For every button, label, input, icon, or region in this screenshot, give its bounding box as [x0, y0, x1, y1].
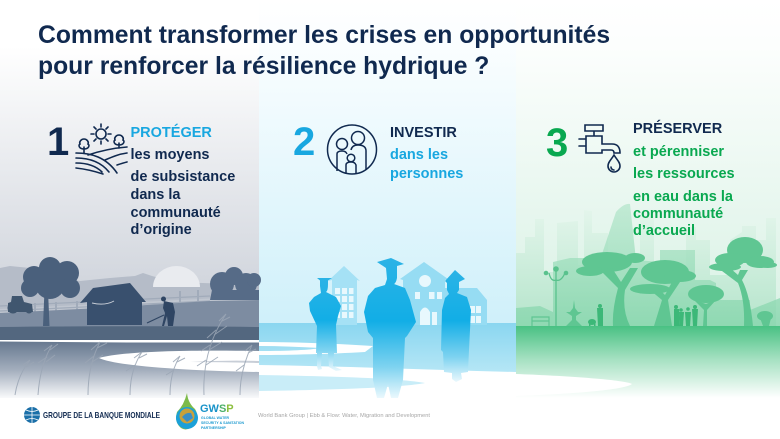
logo: GWSP: GLOBAL WATER [201, 416, 230, 420]
panel: background left [0, 0, 259, 330]
text: section 1: de subsistance [130, 169, 235, 185]
icon: tap and water drop [579, 125, 620, 172]
text: section 2: INVESTIR [390, 125, 457, 141]
text: section 3: et pérenniser [633, 144, 724, 160]
logo: World Bank Group [24, 407, 160, 423]
text: section 2: personnes [390, 166, 463, 182]
footer credit: World Bank Group | Ebb & Flow: Water, Migration and Development [258, 413, 430, 419]
logo: World Bank Group: GROUPE DE LA BANQUE MONDIALE [43, 411, 160, 420]
logo: GWSP: GWSP [200, 403, 234, 415]
text: section 2 [390, 125, 463, 182]
section 2 number: 2 [293, 120, 315, 164]
text: section 1: dans la [130, 187, 181, 203]
logo: GWSP: PARTNERSHIP [201, 426, 226, 430]
panel: background middle [259, 0, 516, 325]
text: section 1 [130, 124, 235, 238]
title: Comment transformer les crises en opportunités [38, 22, 610, 49]
logo: GWSP: SECURITY & SANITATION [201, 421, 244, 425]
text: section 3: PRÉSERVER [633, 120, 723, 137]
panel: background right [516, 0, 780, 330]
text: section 1: les moyens [130, 147, 210, 163]
text: section 2: dans les [390, 147, 448, 163]
illustration: green city park [516, 204, 780, 398]
title [38, 22, 610, 80]
text: section 1: d’origine [130, 222, 192, 238]
text: section 3: les ressources [633, 166, 735, 182]
text: section 3: communauté [633, 206, 723, 222]
icon: fields, sun and trees [76, 124, 127, 174]
text: section 3: d’accueil [633, 223, 695, 239]
illustration: graduates and campus [259, 258, 516, 439]
text: section 1: PROTÉGER [130, 124, 212, 141]
text: section 1: communauté [130, 205, 221, 221]
title: pour renforcer la résilience hydrique ? [38, 53, 489, 80]
text: section 3 [633, 120, 735, 239]
illustration: rural scene [0, 257, 261, 400]
section 3 number: 3 [546, 121, 568, 165]
logo: GWSP [176, 393, 244, 430]
icon: family in a circle [328, 125, 376, 174]
footer band [0, 398, 780, 439]
section 1 number: 1 [47, 120, 69, 164]
text: section 3: en eau dans la [633, 189, 734, 205]
